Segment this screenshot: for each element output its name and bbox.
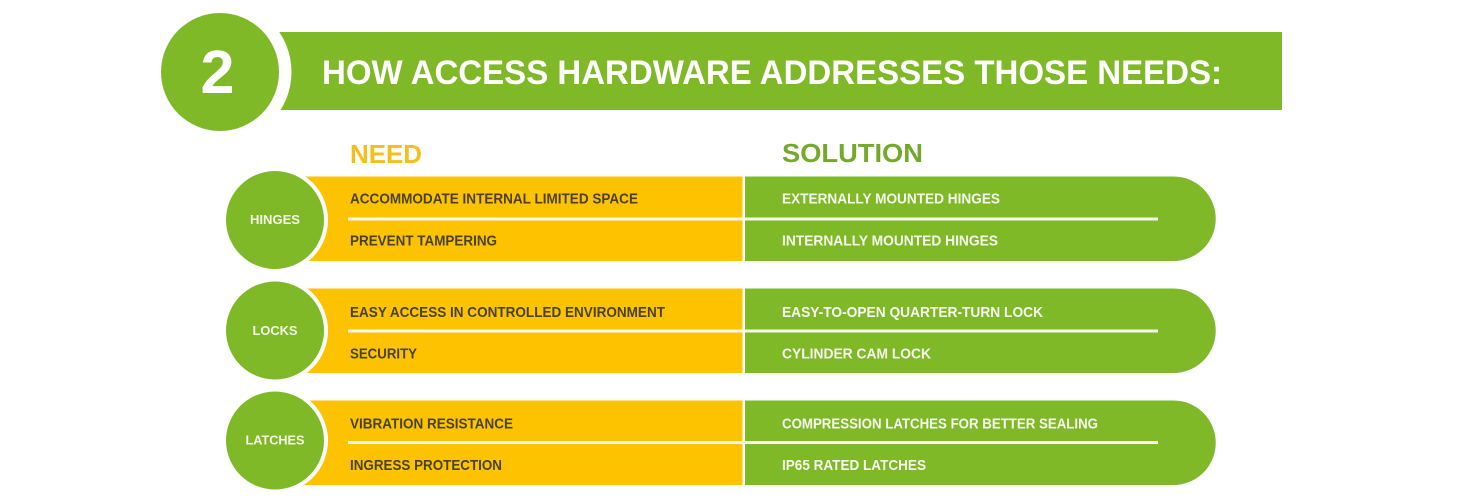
- need: vibration resistance: VIBRATION RESISTANCE: [350, 416, 513, 432]
- need: prevent tampering: PREVENT TAMPERING: [350, 232, 497, 250]
- need: ingress protection: INGRESS PROTECTION: [350, 457, 502, 474]
- need: security: SECURITY: [350, 346, 417, 362]
- panel: locks: [222, 278, 1216, 384]
- need: easy access in controlled environment: EASY ACCESS IN CONTROLLED ENVIRONMENT: [350, 304, 665, 321]
- label: hinges: HINGES: [250, 212, 300, 227]
- solution: cylinder cam lock: CYLINDER CAM LOCK: [782, 346, 931, 362]
- title: HOW ACCESS HARDWARE ADDRESSES THOSE NEEDS:: [322, 54, 1222, 92]
- panel: latches: [222, 388, 1216, 494]
- solution: quarter-turn lock: EASY-TO-OPEN QUARTER-TURN LOCK: [782, 304, 1043, 321]
- column heading: need: NEED: [350, 139, 422, 169]
- label: locks: LOCKS: [252, 323, 298, 338]
- header banner: [148, 0, 1282, 144]
- solution: ip65 rated latches: IP65 RATED LATCHES: [782, 457, 926, 474]
- column heading: solution: SOLUTION: [782, 138, 923, 168]
- number badge: [161, 13, 279, 131]
- solution: externally mounted hinges: EXTERNALLY MOUNTED HINGES: [782, 190, 1000, 208]
- panel: hinges: [222, 167, 1216, 273]
- label: latches: LATCHES: [246, 432, 305, 448]
- solution: internally mounted hinges: INTERNALLY MOUNTED HINGES: [782, 232, 998, 250]
- need: accommodate internal limited space: ACCOMMODATE INTERNAL LIMITED SPACE: [350, 190, 638, 208]
- solution: compression latches: COMPRESSION LATCHES FOR BETTER SEALING: [782, 416, 1098, 432]
- number badge: 2: [201, 38, 234, 106]
